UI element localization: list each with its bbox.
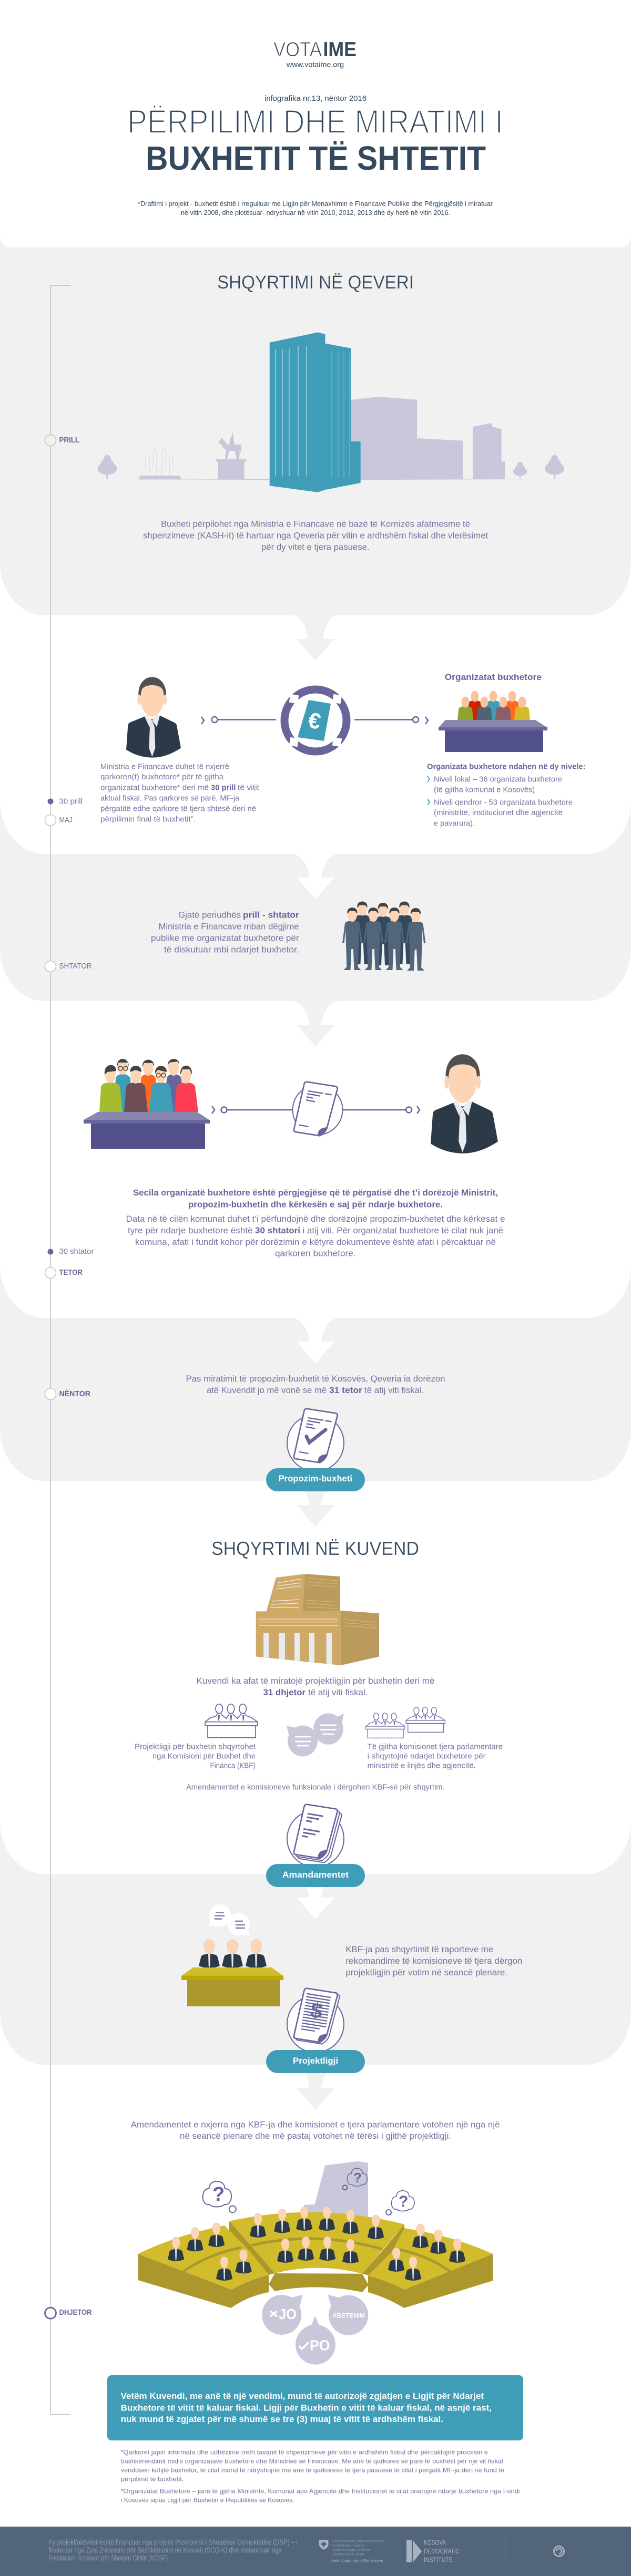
- bubble: PO: PO: [310, 2337, 330, 2354]
- logo: Swiss cooperation: Confederaziun svizra: [332, 2553, 364, 2557]
- marker: TETOR: [45, 1268, 83, 1278]
- vote bubbles: [262, 2295, 368, 2365]
- text: submission deadline: të atij viti fiskal.: [364, 1385, 424, 1395]
- bubble: JO: JO: [279, 2306, 297, 2322]
- funding statement: [48, 2539, 298, 2563]
- thought bubbles: ?: [212, 2183, 225, 2206]
- footnotes: i Kosovës sipas Ligjit për Buxhetin e Republikës së Kosovës.: [121, 2497, 294, 2504]
- logo: Swiss cooperation: Schweizerische Eidgenossenschaft: [332, 2540, 384, 2543]
- heading: budget organisations: Organizatat buxhetore: [445, 672, 542, 682]
- text: government body: [143, 519, 488, 552]
- text: circular deadline: aktual fiskal. Pas qarkores së parë, MF-ja: [100, 794, 240, 803]
- text: responsibility of organisations: 30 shtatori: [255, 1225, 300, 1235]
- marker: PRILL: [45, 435, 79, 446]
- arrow: minister to circular: [201, 717, 276, 724]
- footnotes: bashkërendimit midis organizatave buxhetore dhe Ministrisë së Financave. Me anë të qarkores së parë të buxhetit për një vit fiskal: [121, 2458, 503, 2465]
- panel: government submits to parliament: [0, 1261, 631, 1527]
- thought bubbles: ?: [399, 2193, 408, 2210]
- text: two levels: (të gjitha komunat e Kosovës): [434, 786, 535, 795]
- thought bubbles: [203, 2168, 414, 2215]
- text: plenary vote: në seancë plenare dhe më pastaj votohet në tërësi i gjithë projektligji.: [180, 2131, 451, 2141]
- text: plenary vote: [131, 2119, 500, 2141]
- icon: chat bubbles: [287, 1713, 344, 1756]
- icon: stack of amendments: [287, 1805, 344, 1867]
- text: submission deadline: [186, 1374, 445, 1395]
- logo: VOTAIME: [273, 38, 357, 61]
- text: two levels: (ministritë, institucionet dhe agjencitë: [434, 808, 563, 817]
- bubble: PO: [296, 2316, 335, 2365]
- text: deadline 31 December: të atij viti fiskal.: [308, 1687, 368, 1697]
- icon: bill document with dollar: $: [309, 1998, 324, 2023]
- text: circular deadline: qarkoren(t) buxhetore* për të gjitha: [100, 772, 224, 781]
- label pill: Projektligji: [266, 2050, 365, 2073]
- footnotes: *Qarkoret japin informata dhe udhëzime rreth tavanit të shpenzimeve për vitin e ardhshëm fiskal dhe përcaktojnë procesin e: [121, 2449, 488, 2456]
- label pill: Amandamentet: [266, 1864, 365, 1887]
- icon: budget and finance committee: [205, 1704, 258, 1738]
- marker: SHTATOR: [45, 961, 91, 972]
- title: PËRPILIMI DHE MIRATIMI I: [127, 104, 503, 140]
- text: circular deadline: organizatat buxhetore* deri më: [100, 783, 209, 792]
- icon: speech bubbles: [209, 1904, 250, 1936]
- panel: budget organisations submit: [0, 943, 631, 1364]
- bubble: ABSTENIM: ABSTENIM: [332, 2313, 365, 2320]
- logo: VOTAIME: VOTA: [273, 38, 322, 61]
- text: responsibility of organisations: propozim-buxhetin dhe kërkesën e saj për ndarje buxhetore.: [188, 1199, 443, 1209]
- label pill: Propozim-buxheti: [266, 1468, 365, 1491]
- heading: parliament: SHQYRTIMI NË KUVEND: [211, 1538, 419, 1559]
- logo: round emblem: [554, 2547, 564, 2556]
- legal note: *Draftimi i projekt - buxhetit është i rregulluar me Ligjin për Menaxhimin e Financave Publike dhe Përgjegjësitë i miratuar: [138, 200, 493, 208]
- text: deadline 31 December: 31 dhjetor: [263, 1687, 306, 1697]
- icon: government tower: [270, 332, 361, 492]
- icon: organisations at desk: [439, 691, 547, 752]
- text: committee right: i shqyrtojnë ndarjet buxhetore për: [368, 1753, 486, 1761]
- panel: budget circular: [0, 557, 631, 899]
- text: government body: për dy vitet e tjera pasuese.: [261, 542, 369, 552]
- logo: Swiss cooperation: Confederazione Svizzera: [332, 2548, 370, 2552]
- callout: extension rule: nuk mund të zgjatet për më shumë se tre (3) muaj të vitit të ardhshëm fiskal.: [121, 2414, 443, 2424]
- arrow: organisations to document: [212, 1106, 294, 1114]
- icon: budget organisations crowd: [84, 1059, 210, 1149]
- footer: [0, 2527, 631, 2576]
- logo: Kosova Democratic Institute: INSTITUTE: [424, 2556, 453, 2563]
- marker: NËNTOR: NËNTOR: [59, 1389, 91, 1398]
- logo: Kosova Democratic Institute: KOSOVA: [424, 2539, 446, 2547]
- text: circular deadline: [100, 762, 260, 824]
- text: two levels: [427, 762, 586, 828]
- callout: extension rule: Vetëm Kuvendi, me anë të një vendimi, mund të autorizojë zgjatjen e Ligjit për Ndarjet: [121, 2391, 484, 2401]
- logo: Kosova Democratic Institute: DEMOCRATIC: [424, 2547, 460, 2555]
- arrow: circular to organisations: [354, 717, 428, 724]
- text: plenary vote: Amendamentet e nxjerra nga KBF-ja dhe komisionet e tjera parlamentare votohen një nga një: [131, 2119, 500, 2129]
- text: responsibility of organisations: [126, 1188, 505, 1259]
- title: [127, 104, 503, 177]
- label pill: Projektligji: Projektligji: [293, 2056, 338, 2066]
- marker: DHJETOR: DHJETOR: [59, 2309, 92, 2317]
- text: public hearings: prill - shtator: [243, 910, 299, 920]
- text: public hearings: [151, 910, 299, 954]
- icon: group of officials: [342, 902, 425, 971]
- text: committee left: Financa (KBF): [210, 1761, 256, 1770]
- logo: VOTAIME: IME: [323, 38, 357, 61]
- text: responsibility of organisations: tyre për ndarje buxhetore është: [128, 1225, 253, 1235]
- text: public hearings: të diskutuar mbi ndarjet buxhetor.: [164, 945, 299, 954]
- icon: euro circular: €: [307, 707, 323, 734]
- logo: Swiss cooperation: Confédération suisse: [332, 2544, 364, 2548]
- text: public hearings: Ministria e Financave mban dëgjime: [159, 921, 299, 931]
- text: committee right: Të gjitha komisionet tjera parlamentare: [368, 1743, 503, 1751]
- arrow: document to minister: [342, 1106, 420, 1114]
- text: government body: Buxheti përpilohet nga Ministria e Financave në bazë të Kornizës afatmesme të: [161, 519, 470, 529]
- marker: DHJETOR: [45, 2307, 92, 2319]
- icon: parliament building: [256, 1574, 379, 1665]
- marker: NËNTOR: [45, 1388, 91, 1400]
- text: submission deadline: Pas miratimit të propozim-buxhetit të Kosovës, Qeveria ia dorëzon: [186, 1374, 445, 1384]
- text: circular deadline: Ministria e Financave duhet të nxjerrë: [100, 762, 229, 771]
- text: responsibility of organisations: Secila organizatë buxhetore është përgjegjëse që të përgatisë dhe t’i dorëzojë Ministrit,: [133, 1188, 498, 1198]
- panel: committee report: [0, 1816, 631, 2110]
- callout: extension rule: [107, 2375, 523, 2440]
- marker: TETOR: TETOR: [59, 1269, 83, 1277]
- text: committee right: [368, 1743, 503, 1770]
- text: committee left: Projektligji për buxhetin shqyrtohet: [135, 1743, 256, 1751]
- icon: other committees: [366, 1707, 445, 1738]
- legal note: në vitin 2008, dhe plotësuar- ndryshuar në vitin 2010, 2012, 2013 dhe dy herë në vitin 2016.: [181, 209, 450, 217]
- panel: header: [0, 0, 631, 248]
- logo: Swiss cooperation: Swiss Cooperation Office Kosovo: [331, 2558, 383, 2563]
- marker: PRILL: PRILL: [59, 436, 79, 445]
- text: government body: shpenzimeve (KASH-it) të hartuar nga Qeveria për vitin e ardhshëm fiskal dhe vlerësimet: [143, 531, 488, 540]
- text: KBF report: [345, 1944, 522, 1977]
- text: public hearings: publike me organizatat buxhetore për: [151, 933, 299, 943]
- label pill: Amandamentet: Amandamentet: [282, 1870, 349, 1880]
- text: two levels: Organizata buxhetore ndahen në dy nivele:: [427, 762, 586, 771]
- text: KBF report: rekomandime të komisioneve të tjera dërgon: [345, 1956, 522, 1966]
- panel: review in government: [0, 231, 631, 661]
- title: BUXHETIT TË SHTETIT: [146, 139, 486, 177]
- timeline: [45, 285, 94, 2415]
- bubble: ABSTENIM: [328, 2295, 368, 2335]
- heading: government: SHQYRTIMI NË QEVERI: [217, 272, 414, 293]
- text: amendments: Amendamentet e komisioneve funksionale i dërgohen KBF-së për shqyrtim.: [186, 1784, 445, 1792]
- panel: final approval in parliament: [0, 585, 631, 2527]
- marker: 30 prill: 30 prill: [59, 798, 83, 806]
- background skyline: [65, 585, 565, 2244]
- text: two levels: e pavarura).: [434, 819, 475, 828]
- icon: bill document with dollar: [287, 1988, 344, 2053]
- text: deadline 31 December: [197, 1676, 434, 1697]
- label pill: Propozim-buxheti: Propozim-buxheti: [279, 1474, 352, 1483]
- funding statement: Fondacioni Kosovar për Shoqëri Civile (KCSF): [48, 2554, 168, 2563]
- icon: approved document: [287, 1409, 344, 1471]
- marker: 30 shtator: 30 shtator: [59, 1248, 94, 1256]
- icon: budget proposal document: [292, 1082, 343, 1136]
- text: responsibility of organisations: qarkoren buxhetore.: [275, 1249, 355, 1259]
- icon: Minister of Finance: [126, 677, 181, 758]
- callout: extension rule: Buxhetore të vitit të kaluar fiskal. Ligji për Buxhetin e vitit të kaluar fiskal, në asnjë rast,: [121, 2403, 492, 2413]
- logo: Kosova Democratic Institute: [406, 2539, 460, 2563]
- text: responsibility of organisations: Data në të cilën komunat duhet t’i përfundojnë dhe dorëzojnë propozim-buxhetet dhe kërkesat e: [126, 1214, 505, 1224]
- edition line: infografika nr.13, nëntor 2016: [264, 94, 367, 103]
- icon: euro circular: [284, 689, 347, 751]
- text: KBF report: projektligjin për votim në seancë plenare.: [345, 1967, 507, 1977]
- text: public hearings: Gjatë periudhës: [178, 910, 241, 920]
- footnotes: përpilimit të buxhetit.: [121, 2476, 184, 2483]
- text: responsibility of organisations: i atij viti. Për organizatat buxhetore të cilat nuk janë: [303, 1225, 503, 1235]
- text: KBF report: KBF-ja pas shqyrtimit të raporteve me: [345, 1944, 493, 1954]
- funding statement: financuar nga Zyra Zvicerane për Bashkëpunim në Kosovë (SCO-K) dhe menaxhuar nga: [48, 2547, 282, 2555]
- bubble: JO: [262, 2295, 303, 2335]
- funding statement: Ky projekt/aktivitet është financuar nga projekti Promovimi i Shoqërisë Demokratike (DSP) – i: [48, 2539, 298, 2547]
- text: committee left: [135, 1743, 256, 1770]
- text: circular deadline: përpilimin final të buxhetit”.: [100, 815, 196, 824]
- panel: parliament review: [0, 1424, 631, 1919]
- city skyline: [85, 397, 584, 480]
- text: circular deadline: 30 prill: [211, 783, 236, 792]
- footnotes: [121, 2449, 520, 2504]
- footnotes: *Organizatat Buxhetore – janë të gjitha Ministritë, Komunat apo Agjencitë dhe Institucionet të cilat pranojnë ndarje buxhetore nga Fondi: [121, 2488, 520, 2495]
- icon: committee at desk: [181, 1940, 283, 2006]
- website: www.votaime.org: [286, 61, 344, 68]
- legal note: [138, 200, 493, 217]
- logo: Swiss cooperation: [319, 2540, 384, 2563]
- text: circular deadline: përgatitë edhe qarkore të tjera shtesë deri në: [100, 804, 256, 813]
- marker: SHTATOR: SHTATOR: [59, 962, 91, 971]
- text: deadline 31 December: Kuvendi ka afat të miratojë projektligjin për buxhetin deri më: [197, 1676, 434, 1686]
- text: two levels: Niveli qendror - 53 organizata buxhetore: [434, 798, 573, 807]
- chart: parliament hemicycle: [138, 2207, 493, 2308]
- text: responsibility of organisations: komuna, afati i fundit kohor për dorëzimin e këtyre dokumenteve është afati i përcaktuar në: [135, 1237, 496, 1247]
- text: circular deadline: të vitit: [238, 783, 260, 792]
- marker: 30 prill: [47, 798, 83, 806]
- text: committee left: nga Komisioni për Buxhet dhe: [152, 1753, 256, 1761]
- text: committee right: ministritë e linjës dhe agjencitë.: [368, 1761, 476, 1770]
- footnotes: vendosen kufijtë buxhetor, të cilat mund të ndryshojnë me anë të qarkoreve të tjera pasuese të cilat i përgatit MF-ja deri në fund të: [121, 2467, 504, 2474]
- text: submission deadline: 31 tetor: [329, 1385, 362, 1395]
- text: two levels: Niveli lokal – 36 organizata buxhetore: [434, 775, 562, 784]
- text: submission deadline: atë Kuvendit jo më vonë se më: [207, 1385, 327, 1395]
- panel: public hearings: [0, 796, 631, 1047]
- marker: MAJ: [45, 815, 73, 826]
- marker: MAJ: MAJ: [59, 816, 73, 825]
- icon: minister: [431, 1054, 498, 1153]
- thought bubbles: ?: [353, 2170, 362, 2186]
